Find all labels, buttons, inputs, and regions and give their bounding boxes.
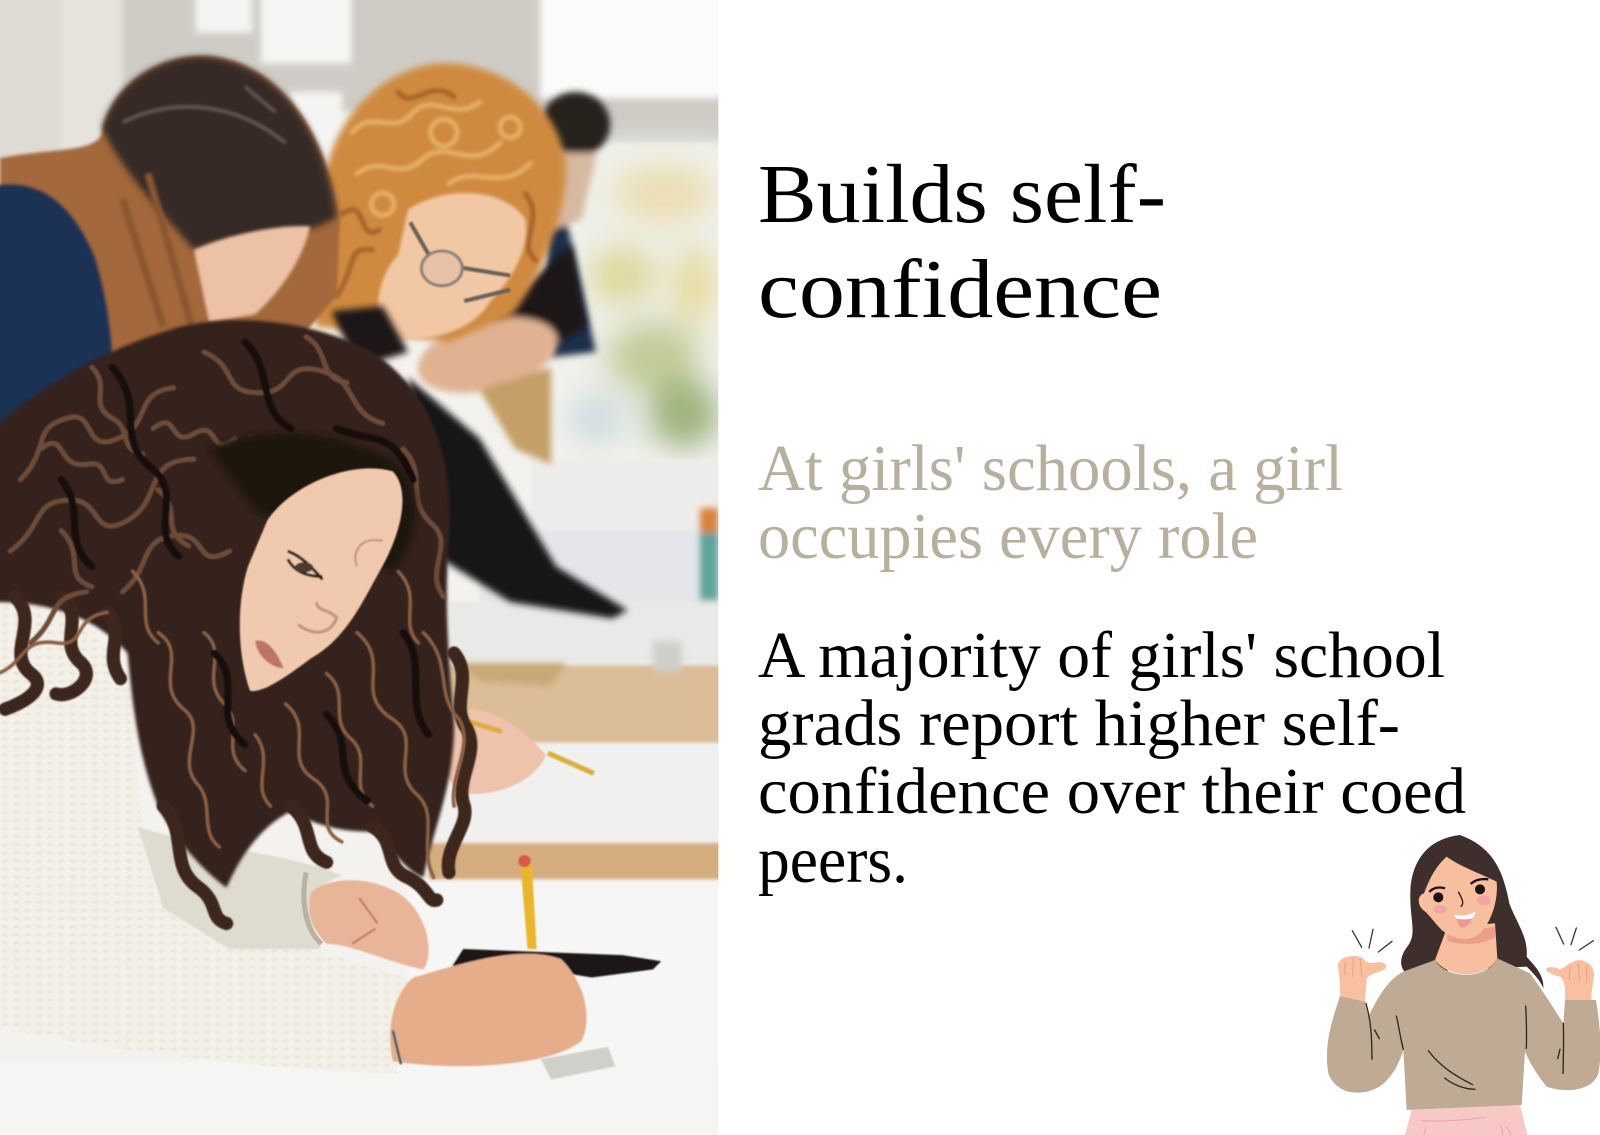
hands [1338, 956, 1594, 1002]
skirt [1405, 1105, 1527, 1135]
body text: peers. [758, 824, 908, 897]
skirt fold lines [1422, 1117, 1512, 1135]
subtitle [758, 432, 1343, 573]
photo: students drawing at a table [0, 0, 730, 1135]
subtitle: occupies every role [758, 500, 1258, 573]
front student hands, pencil and eraser [309, 855, 661, 1080]
background student with blonde hair [408, 245, 628, 618]
front student face [240, 468, 402, 691]
thick curly locks forming the ragged hair edge [5, 597, 471, 923]
body text: A majority of girls' school [758, 619, 1445, 692]
body text [758, 619, 1466, 897]
blurred foliage through window [566, 143, 730, 459]
body text: grads report higher self- [758, 687, 1400, 760]
student with red curly hair [312, 63, 566, 367]
room background and windows [0, 0, 729, 184]
clothing fold lines [1366, 1003, 1564, 1089]
finger lines [1345, 958, 1587, 983]
nose and mouth [1454, 892, 1475, 927]
red-haired student face and glasses [378, 193, 526, 340]
body text: confidence over their coed [758, 755, 1466, 828]
tabletop, paper and wood strips [426, 460, 718, 882]
sweater [1327, 958, 1600, 1110]
neck [1435, 923, 1497, 974]
background student in navy [541, 92, 610, 357]
illustration: girl pointing thumbs at herself [1327, 835, 1600, 1135]
chin shadow [1447, 927, 1495, 944]
cheeks [1434, 895, 1490, 914]
title: Builds self- [758, 148, 1166, 241]
eyes and brows [1429, 879, 1488, 902]
front student curly hair mass [0, 320, 471, 923]
excitement marks [1352, 927, 1593, 952]
front student sweater [0, 566, 413, 1073]
hair [1401, 835, 1543, 988]
background hand holding pencil [437, 709, 594, 794]
subtitle: At girls' schools, a girl [758, 432, 1343, 505]
student with long brown hair and navy sweater [0, 56, 340, 449]
title [758, 148, 1166, 336]
face [1419, 857, 1497, 939]
title: confidence [758, 243, 1162, 336]
blurred objects on back table [459, 508, 718, 686]
